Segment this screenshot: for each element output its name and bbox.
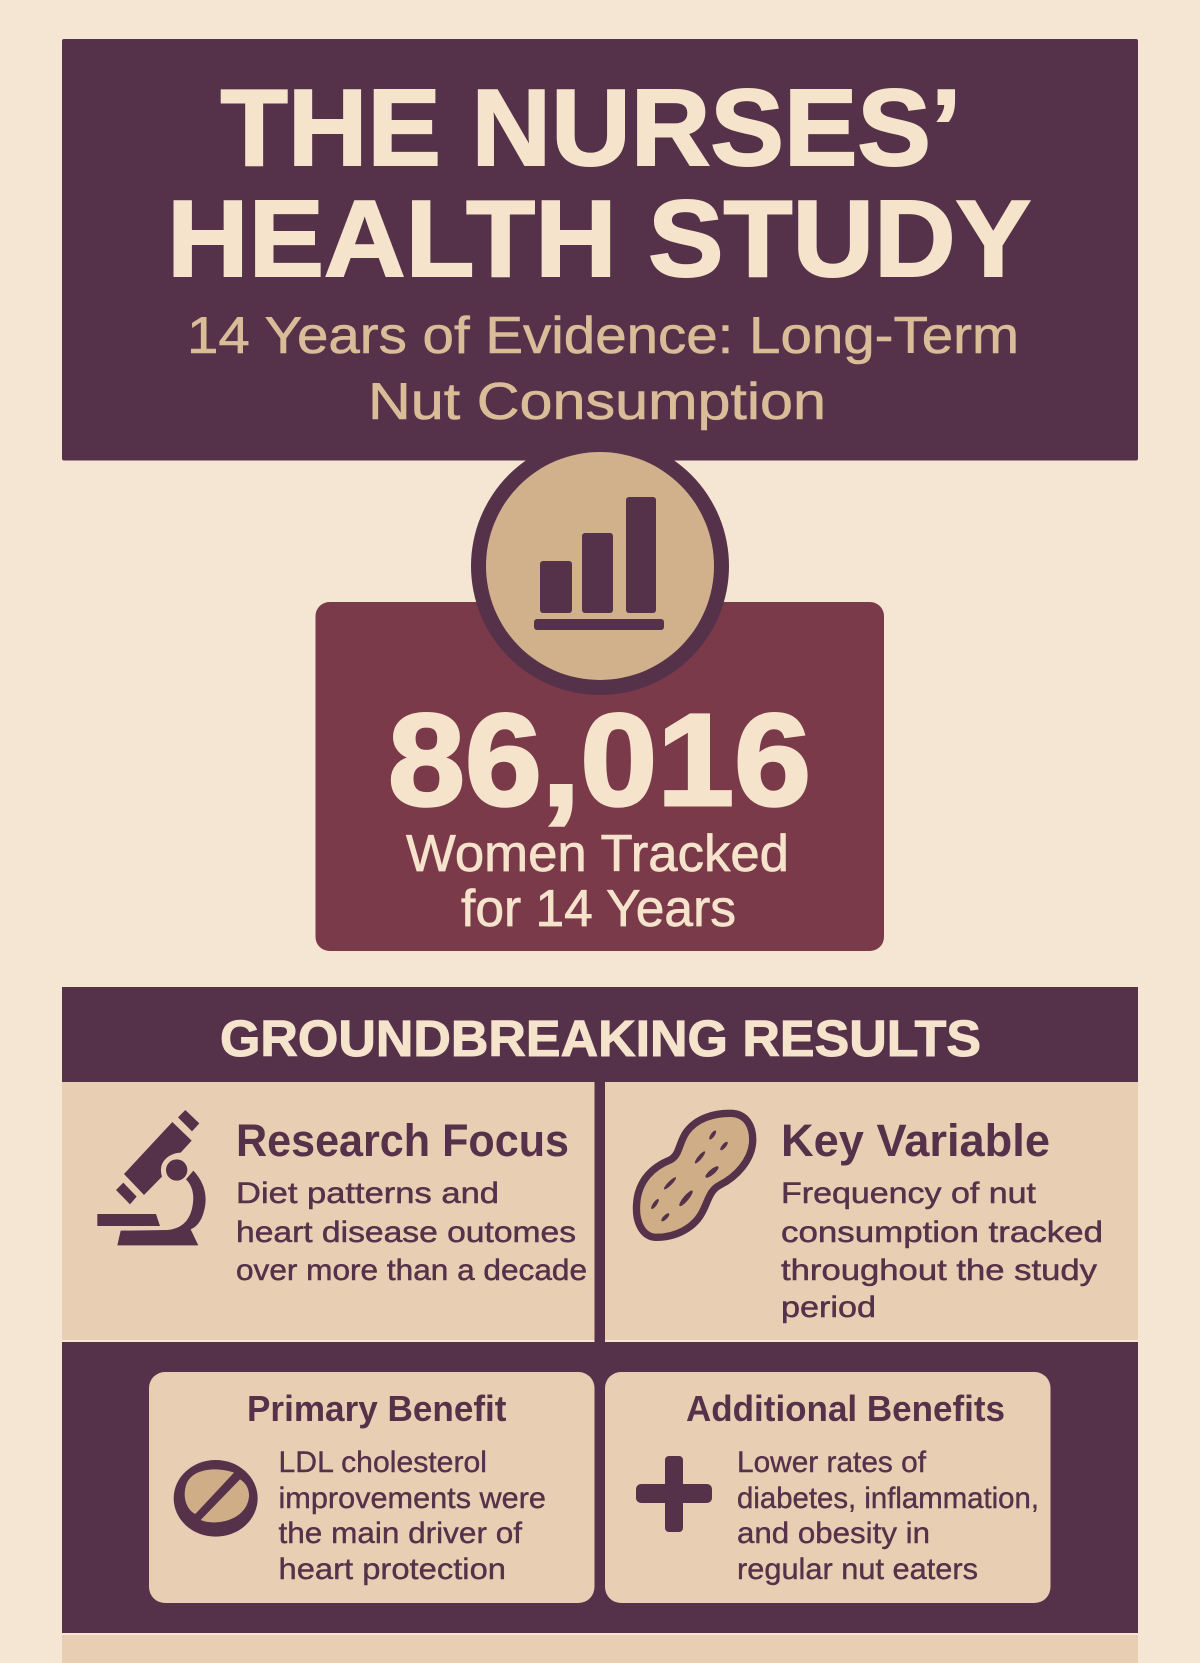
panel: key variable [605,1082,1138,1340]
additional benefits text [737,1446,1039,1586]
additional benefits text: regular nut eaters [737,1553,978,1586]
stat caption: for 14 Years [461,880,736,938]
icon: peanut [636,1113,753,1237]
panel: benefits band [62,1342,1138,1633]
stat number: 86,016 [388,686,811,833]
research focus text: over more than a decade [236,1254,587,1287]
stat caption: Women Tracked [406,825,789,883]
key variable text: period [781,1291,876,1324]
icon: plus [636,1456,712,1532]
primary benefit text: the main driver of [278,1517,523,1550]
section heading bar: GROUNDBREAKING RESULTS [220,1010,981,1067]
research focus text [236,1177,587,1287]
section heading bar [62,987,1138,1082]
primary benefit text: improvements were [278,1482,546,1515]
title: HEALTH STUDY [167,178,1031,300]
research focus text: Diet patterns and [236,1177,499,1210]
card: additional benefits [605,1372,1050,1603]
research focus text: heart disease outomes [236,1216,576,1249]
key variable heading: Key Variable [781,1115,1050,1166]
additional benefits text: Lower rates of [737,1446,927,1479]
primary benefit text: heart protection [278,1553,506,1586]
card: primary benefit [149,1372,594,1603]
primary benefit text [278,1446,546,1586]
subtitle: Nut Consumption [368,373,826,431]
key variable text: consumption tracked [781,1216,1103,1249]
primary benefit heading: Primary Benefit [247,1388,506,1429]
subtitle [187,307,1019,431]
divider between upper panels [594,1082,605,1342]
additional benefits text: diabetes, inflammation, [737,1482,1039,1515]
title: THE NURSES’ [220,67,962,189]
primary benefit text: LDL cholesterol [278,1446,487,1479]
research focus heading: Research Focus [236,1115,569,1166]
key variable text: throughout the study [781,1254,1097,1287]
subtitle: 14 Years of Evidence: Long-Term [187,307,1019,365]
stat card: 86,016 women [316,602,884,951]
header panel [62,39,1138,460]
icon: pill [174,1460,258,1537]
icon: microscope [97,1110,206,1245]
key variable text [781,1177,1103,1324]
additional benefits text: and obesity in [737,1517,930,1550]
key variable text: Frequency of nut [781,1177,1037,1210]
panel: research focus [62,1082,594,1340]
stat caption [406,825,789,938]
title [167,67,1031,300]
panel: cropped bottom strip [62,1635,1138,1663]
icon: bar chart badge [471,437,729,695]
additional benefits heading: Additional Benefits [686,1388,1005,1429]
